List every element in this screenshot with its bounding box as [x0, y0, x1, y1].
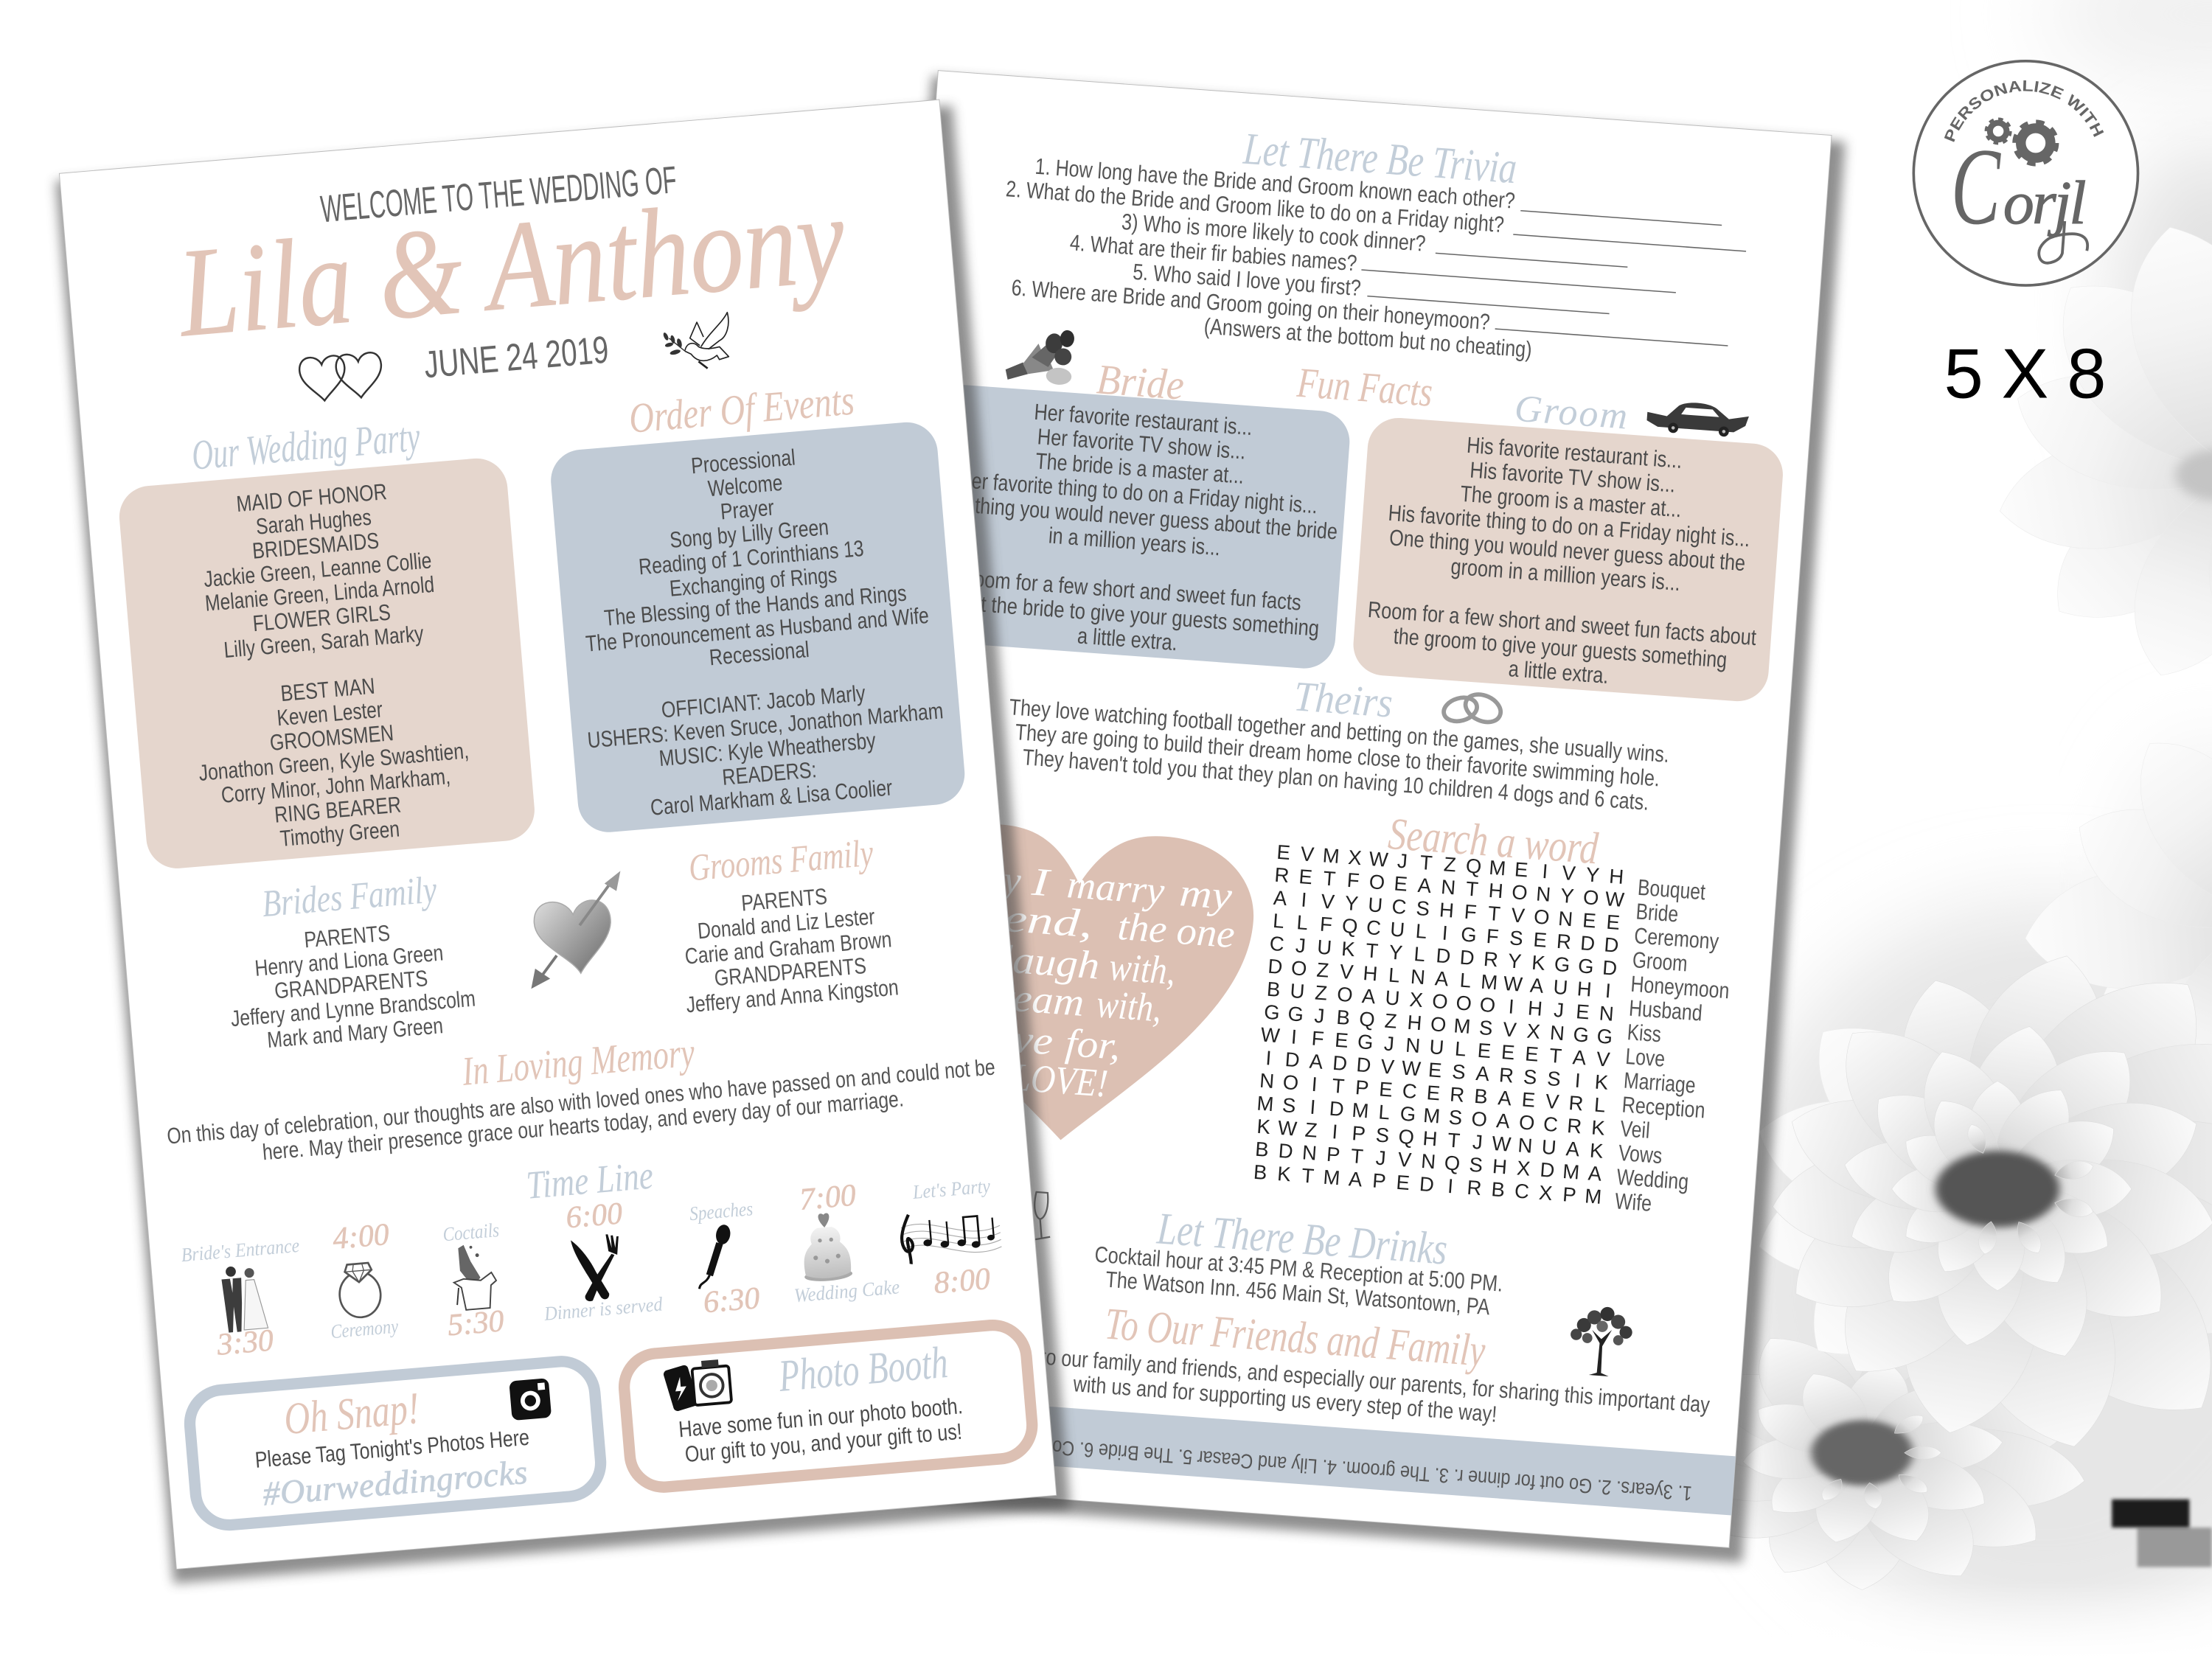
icon: tree	[1568, 1304, 1634, 1378]
panel: groom fun facts	[1352, 416, 1785, 703]
panel: order of events: The Blessing of the Hands and Rings	[603, 581, 908, 631]
word list: Wedding	[1616, 1165, 1689, 1195]
heart with script quote	[885, 818, 1259, 1153]
timeline: wedding cake: 7:00	[798, 1178, 858, 1217]
word list: Honeymoon	[1630, 972, 1731, 1003]
heart with script quote: with,	[1107, 944, 1177, 993]
brides family list: Jeffery and Lynne Brandscolm	[230, 986, 476, 1031]
word list: Ceremony	[1633, 923, 1720, 955]
word list: Bouquet	[1637, 875, 1706, 905]
panel: groom fun facts: His favorite thing to do on a Friday night is...	[1388, 501, 1751, 551]
panel: wedding party: Jonathon Green, Kyle Swashtien,	[198, 738, 470, 786]
word list: Wife	[1614, 1188, 1652, 1216]
word list: Marriage	[1623, 1068, 1697, 1098]
trivia questions: 1. How long have the Bride and Groom known each other?	[1034, 154, 1516, 214]
panel: bride fun facts: The bride is a master at...	[1034, 448, 1245, 489]
word list	[1614, 875, 1737, 1221]
panel: wedding party: Corry Minor, John Markham,	[220, 764, 451, 808]
icon: music notes	[900, 1207, 1003, 1264]
heading: Our Wedding Party: Our Wedding Party	[190, 414, 422, 479]
icon: heart with arrow	[522, 871, 630, 989]
panel: bride fun facts: about the bride to give your guests something	[939, 588, 1320, 641]
brides family list: Henry and Liona Green	[254, 941, 445, 981]
heading: Let There Be Drinks: Let There Be Drinks	[1155, 1203, 1449, 1275]
timeline: cocktails	[439, 1219, 508, 1342]
panel: bride fun facts: in a million years is...	[1048, 523, 1221, 560]
timeline: party: 8:00	[933, 1261, 992, 1300]
panel: order of events: OFFICIANT: Jacob Marly	[661, 680, 866, 722]
panel: Photo Booth: Have some fun in our photo booth.	[678, 1393, 964, 1442]
heading: Grooms Family: Grooms Family	[687, 832, 874, 889]
panel: wedding party: Timothy Green	[279, 816, 400, 851]
panel: order of events	[549, 420, 967, 835]
word list: Bride	[1635, 899, 1679, 927]
panel: bride fun facts: Her favorite thing to do on a Friday night is...	[958, 467, 1318, 518]
trivia questions: (Answers at the bottom but no cheating)	[1203, 314, 1533, 363]
heart with script quote: friend,	[953, 892, 1094, 946]
heading: Fun Facts: Fun Facts	[1295, 360, 1434, 416]
text: theirs facts: They haven't told you that they plan on having 10 children 4 dogs and 6 cats.	[1022, 745, 1649, 815]
flower: middle right	[2020, 714, 2212, 1130]
badge logo word	[1951, 126, 2087, 263]
panel: wedding party: Lilly Green, Sarah Marky	[223, 621, 425, 663]
panel: order of events: Carol Markham & Lisa Coolier	[650, 775, 894, 821]
icon: couple	[220, 1264, 268, 1333]
heart with script quote: I	[967, 934, 990, 980]
timeline: ceremony	[321, 1217, 399, 1342]
timeline: bride's entrance	[181, 1234, 309, 1365]
timeline: ceremony: Ceremony	[330, 1315, 399, 1342]
word search grid: NOITPECERBAEVRL	[1259, 1069, 1606, 1117]
grooms family list: PARENTS	[740, 884, 828, 916]
icon: microphone	[694, 1222, 737, 1289]
timeline: speeches	[689, 1197, 762, 1320]
timeline: speeches: 6:30	[702, 1281, 761, 1320]
icon: vintage car	[1646, 400, 1750, 439]
heading: Order Of Events: Order Of Events	[627, 377, 856, 442]
text: theirs facts	[1005, 694, 1670, 816]
panel: Photo Booth	[622, 1323, 1034, 1490]
panel: order of events: The Pronouncement as Husband and Wife	[585, 603, 930, 657]
heading: Time Line: Time Line	[525, 1153, 655, 1208]
panel: groom fun facts: His favorite restaurant is...	[1466, 433, 1683, 473]
panel: bride fun facts: Her favorite restaurant is...	[1034, 400, 1253, 440]
brides family list	[223, 914, 479, 1056]
answer band with upside-down text	[838, 1391, 1736, 1516]
page sheet	[59, 100, 1057, 1570]
timeline: wedding cake	[785, 1174, 900, 1306]
panel: Oh Snap: Please Tag Tonight's Photos Here	[254, 1425, 530, 1473]
word list: Husband	[1628, 996, 1703, 1026]
timeline: cocktails: 5:30	[446, 1303, 505, 1342]
word search grid: BKTMAPEDIRBCXPM	[1253, 1160, 1602, 1208]
panel: groom fun facts: Room for a few short and sweet fun facts about	[1367, 597, 1757, 650]
title: couple names: Lila & Anthony	[171, 168, 850, 364]
heart with script quote: the one	[1116, 904, 1237, 956]
word search grid: WIFEGJNULEEETAV	[1260, 1023, 1611, 1071]
timeline: party: Let's Party	[911, 1174, 991, 1203]
right page (back)	[829, 70, 1846, 1563]
heading: Groom: Groom	[1513, 388, 1629, 438]
word search grid: CJUKTYLDDRYKGGD	[1269, 932, 1618, 980]
heart with script quote: dream	[975, 972, 1085, 1025]
text: drinks details: The Watson Inn. 456 Main St, Watsontown, PA	[1105, 1267, 1491, 1320]
page sheet	[835, 71, 1832, 1547]
word list: Vows	[1618, 1140, 1663, 1168]
brides family list: PARENTS	[303, 921, 391, 952]
heart with script quote: live	[987, 1014, 1054, 1063]
trivia questions: 2. What do the Bride and Groom like to do on a Friday night?	[1005, 176, 1505, 237]
icon: crossed fork and knife	[571, 1233, 624, 1303]
word list: Kiss	[1627, 1020, 1662, 1047]
grooms family list: Jeffery and Anna Kingston	[685, 975, 900, 1017]
text: theirs facts: They love watching football together and betting on the games, she usually wins.	[1009, 694, 1670, 767]
grooms family list: Donald and Liz Lester	[697, 904, 876, 944]
trivia questions: 5. Who said I love you first?	[1132, 260, 1362, 301]
word search grid: KWZIPSQHTJWNUAK	[1256, 1115, 1604, 1163]
trivia questions: 6. Where are Bride and Groom going on their honeymoon?	[1011, 275, 1491, 335]
flower: small lower	[1688, 1309, 2094, 1593]
word search grid: BUZOAUXOOOIHJEN	[1266, 978, 1615, 1025]
panel: order of events: Song by Lilly Green	[669, 515, 830, 553]
timeline: dinner	[535, 1193, 664, 1325]
panel: order of events: MUSIC: Kyle Wheathersby	[658, 728, 877, 771]
text: thank you: Thank you to our family and friends, and especially our parents, for sharing this important day	[949, 1337, 1711, 1418]
word search grid	[1250, 840, 1627, 1208]
word search grid: LLFQCULIGFSERDD	[1272, 909, 1619, 957]
panel: groom fun facts: a little extra.	[1508, 656, 1610, 689]
word list: Groom	[1632, 947, 1688, 976]
panel: order of events: USHERS: Keven Sruce, Jonathon Markham	[586, 698, 945, 753]
panel: order of events: READERS:	[721, 757, 818, 790]
timeline: cocktails: Coctails	[442, 1219, 500, 1245]
panel: wedding party: FLOWER GIRLS	[251, 600, 392, 636]
timeline: ceremony: 4:00	[331, 1217, 391, 1256]
panel: order of events: Prayer	[720, 495, 775, 524]
word list: Love	[1624, 1044, 1666, 1072]
memorial text: here. May their presence grace our hearts today, and every day of our marriage.	[262, 1086, 905, 1165]
word search grid: DOZVHLNALMWAUHI	[1267, 955, 1612, 1002]
timeline: dinner: Dinner is served	[543, 1292, 664, 1325]
brides family list: GRANDPARENTS	[274, 966, 428, 1003]
timeline: bride's entrance: Bride's Entrance	[181, 1234, 300, 1266]
icon: wedding cake	[799, 1211, 853, 1283]
left page (front)	[55, 99, 1071, 1584]
panel: groom fun facts: The groom is a master at...	[1459, 481, 1683, 522]
heart with script quote: marry	[1065, 862, 1166, 913]
icon: diamond ring	[337, 1262, 383, 1319]
panel: Photo Booth: Our gift to you, and your gift to us!	[684, 1419, 963, 1467]
timeline: dinner: 6:00	[565, 1196, 624, 1235]
panel: wedding party: Melanie Green, Linda Arnold	[204, 572, 435, 616]
date: JUNE 24 2019	[422, 328, 611, 386]
panel: order of events: Recessional	[709, 637, 810, 670]
panel: order of events: Exchanging of Rings	[669, 562, 838, 602]
panel: wedding party: BEST MAN	[279, 674, 376, 706]
word search grid: IDADDVWESARSSIK	[1265, 1046, 1609, 1094]
trivia questions: 4. What are their fir babies names?	[1069, 230, 1358, 276]
grooms family list: GRANDPARENTS	[713, 953, 867, 991]
icon: instagram camera	[509, 1378, 552, 1421]
heading: Theirs: Theirs	[1293, 673, 1394, 727]
text: drinks details	[1092, 1242, 1503, 1320]
panel: wedding party: GROOMSMEN	[269, 720, 394, 756]
icon: dove with olive branch	[662, 313, 728, 369]
word search grid: GGJBQZHOMSVXNGG	[1263, 1000, 1613, 1048]
trivia questions	[996, 152, 1543, 363]
panel: Photo Booth: Photo Booth	[776, 1337, 950, 1401]
panel: Oh Snap	[187, 1359, 603, 1528]
memorial text: On this day of celebration, our thoughts are also with loved ones who have passed on and could not be	[166, 1054, 996, 1149]
word search grid: AIVYUCSHFTVONEE	[1273, 886, 1621, 934]
heart with script quote: LOVE!	[1010, 1054, 1110, 1106]
heading: Bride: Bride	[1095, 356, 1186, 409]
heading: In Loving Memory: In Loving Memory	[460, 1031, 697, 1095]
panel: bride fun facts: Her favorite TV show is...	[1037, 424, 1247, 464]
icon: linked hearts	[299, 352, 383, 403]
size label: 5 X 8	[1944, 335, 2106, 414]
icon: wedding rings	[1439, 687, 1506, 729]
page shadow	[55, 105, 1071, 1584]
panel: Oh Snap: Oh Snap!	[282, 1383, 421, 1444]
panel: wedding party: Jackie Green, Leanne Collie	[203, 548, 433, 592]
panel: wedding party: MAID OF HONOR	[235, 479, 388, 517]
background: soft gray flowers	[1552, 0, 2212, 1658]
page shadow	[829, 76, 1846, 1563]
word search grid: RETFOEANTHONYOW	[1274, 863, 1625, 911]
text: theirs facts: They are going to build their dream home close to their favorite swimming hole.	[1015, 720, 1660, 791]
answer lines	[1358, 200, 1747, 346]
timeline: bride's entrance: 3:30	[215, 1323, 275, 1362]
panel: groom fun facts: the groom to give your guests something	[1393, 624, 1728, 673]
text: thank you: with us and for supporting us every step of the way!	[1072, 1371, 1498, 1427]
panel: order of events: Processional	[690, 445, 796, 478]
heading: To Our Friends and Family: To Our Friends and Family	[1103, 1299, 1487, 1376]
word search grid: BDNPTJVNQSHXDMA	[1254, 1138, 1603, 1185]
heading: Let There Be Trivia: Let There Be Trivia	[1241, 124, 1518, 193]
panel: wedding party	[117, 456, 537, 871]
word search grid: MSIDMLGMSOAOCRK	[1256, 1092, 1606, 1140]
panel: Oh Snap: #Ourweddingrocks	[261, 1453, 529, 1513]
answer band with upside-down text: 1. 3years. 2. Go out for dinne r. 3. The groom. 4. Lily and Ceasar 5. The Bride 6. Cook Islands	[973, 1430, 1693, 1505]
title: welcome line: WELCOME TO THE WEDDING OF	[319, 158, 678, 230]
heading: Brides Family: Brides Family	[260, 868, 438, 925]
panel: groom fun facts: One thing you would never guess about the	[1388, 525, 1746, 576]
panel: groom fun facts: His favorite TV show is...	[1469, 458, 1676, 498]
timeline: speeches: Speaches	[689, 1197, 754, 1225]
icon: gears	[1986, 119, 2057, 164]
panel: bride fun facts: One thing you would never guess about the bride	[934, 490, 1338, 544]
panel: wedding party: Sarah Hughes	[255, 505, 372, 540]
badge arc text: PERSONALIZE WITH	[1944, 80, 2104, 142]
icon: bouquet	[1005, 326, 1075, 386]
heart with script quote: my	[1178, 870, 1234, 918]
badge logo word: orjl	[2003, 169, 2087, 237]
badge: personalize with Corjl	[1913, 60, 2140, 287]
heart with script quote: I	[1029, 860, 1053, 905]
panel: wedding party: BRIDESMAIDS	[251, 528, 380, 564]
panel: order of events: Welcome	[707, 470, 784, 501]
panel: wedding party: Keven Lester	[276, 697, 383, 731]
flower: large dahlia	[1744, 941, 2212, 1463]
timeline: wedding cake: Wedding Cake	[793, 1275, 900, 1306]
flower: top right	[1989, 212, 2212, 693]
grooms family list: Carie and Graham Brown	[684, 927, 893, 969]
word search grid: EVMXWJTZQMEIVYH	[1276, 840, 1624, 888]
panel: groom fun facts: groom in a million years is...	[1450, 554, 1681, 596]
icon: wine glass	[1032, 1192, 1053, 1241]
word list: Reception	[1621, 1092, 1706, 1124]
grooms family list	[677, 879, 900, 1017]
panel: bride fun facts: Room for a few short and sweet fun facts	[960, 565, 1302, 616]
panel: bride fun facts	[917, 383, 1352, 671]
word list: Veil	[1619, 1116, 1651, 1143]
heart with script quote: for,	[1064, 1020, 1122, 1068]
heart with script quote: Today	[928, 852, 1023, 902]
memorial text	[166, 1054, 998, 1173]
badge logo word: C	[1951, 126, 2001, 248]
panel: wedding party: RING BEARER	[274, 792, 402, 828]
text: drinks details: Cocktail hour at 3:45 PM & Reception at 5:00 PM.	[1094, 1242, 1503, 1297]
brides family list: Mark and Mary Green	[266, 1013, 444, 1053]
timeline: party	[897, 1174, 1006, 1303]
icon: phone and camera	[662, 1359, 732, 1413]
panel: bride fun facts: a little extra.	[1077, 623, 1178, 655]
trivia questions: 3) Who is more likely to cook dinner?	[1121, 209, 1427, 257]
heart with script quote: with,	[1095, 981, 1163, 1030]
heading: Search a word: Search a word	[1387, 809, 1600, 874]
flower: dark gap and stem	[2112, 1499, 2212, 1567]
panel: order of events: Reading of 1 Corinthians 13	[638, 536, 865, 579]
heart with script quote: laugh	[999, 936, 1101, 988]
icon: champagne bucket	[451, 1242, 498, 1311]
